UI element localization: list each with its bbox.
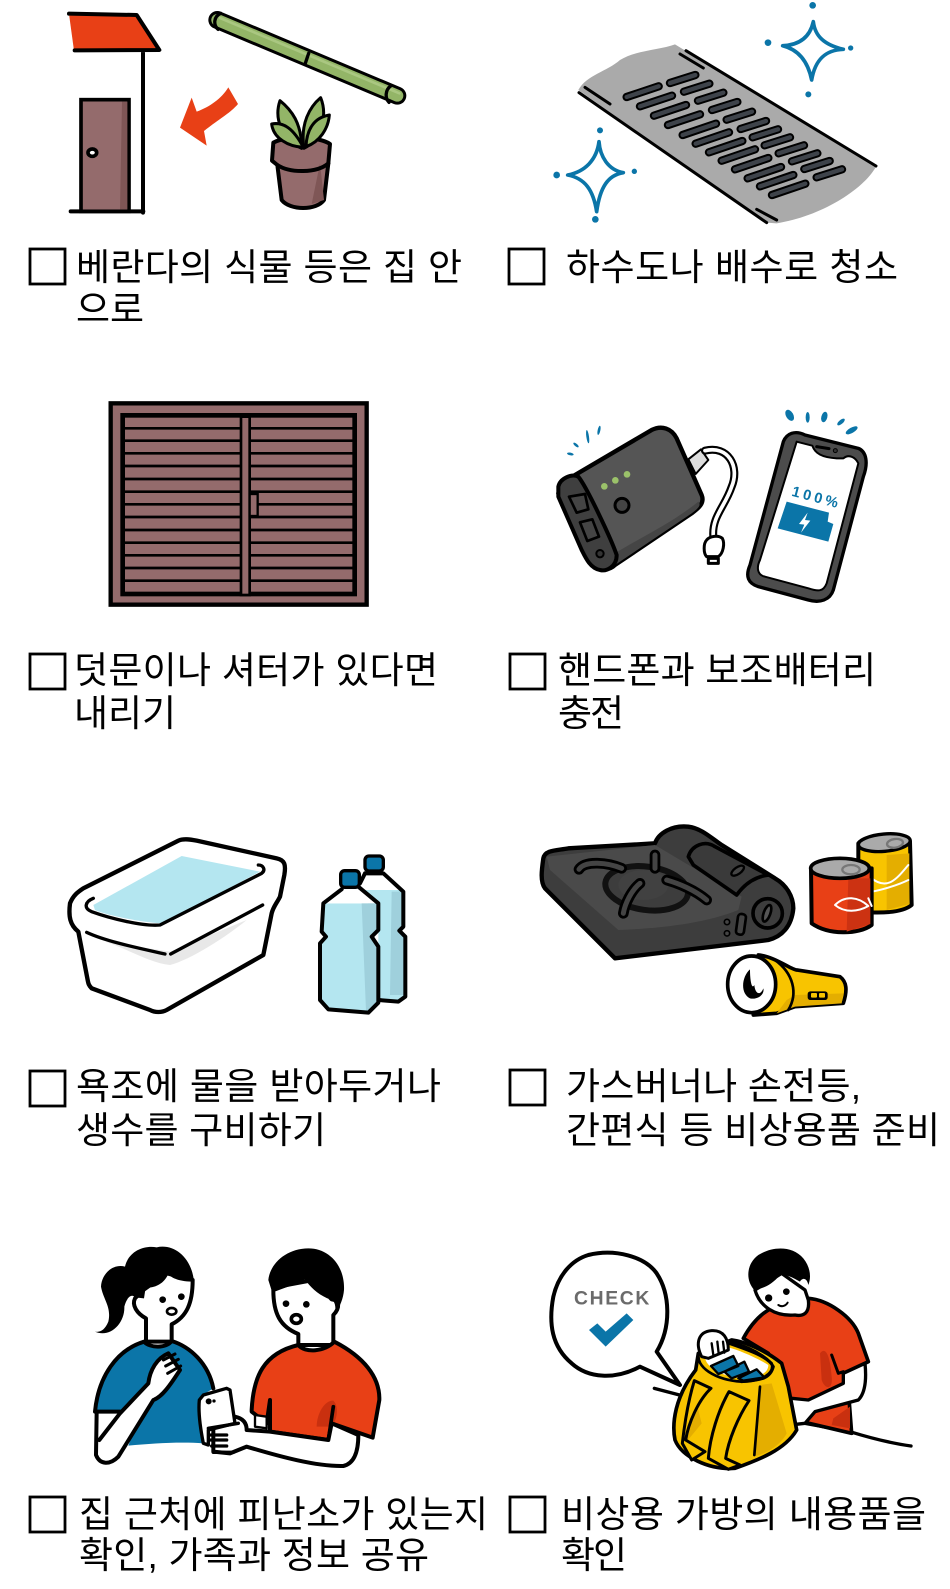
text block [79, 1494, 488, 1576]
checkbox [30, 1497, 65, 1532]
panel: check emergency bag [510, 1249, 926, 1576]
text block: 가스버너나 손전등, [566, 1066, 861, 1107]
icon: drain grate with sparkles [553, 2, 876, 223]
checkbox [510, 1497, 545, 1532]
icon: shutter [111, 403, 367, 605]
panel: store water [30, 839, 441, 1151]
speech bubble [551, 1253, 680, 1385]
text block: 욕조에 물을 받아두거나 [76, 1066, 441, 1107]
text block: 확인 [561, 1535, 627, 1576]
checkbox [30, 654, 65, 689]
icon: bathtub and water bottles [69, 839, 405, 1013]
panel: bring plants indoors [30, 13, 462, 330]
icon: power bank and smartphone [558, 408, 866, 601]
text block [76, 1066, 441, 1151]
checkbox [30, 249, 65, 284]
text block: 비상용 가방의 내용품을 [561, 1494, 926, 1535]
text block: 간편식 등 비상용품 준비 [566, 1110, 940, 1151]
text block: 집 근처에 피난소가 있는지 [79, 1494, 488, 1535]
text block [74, 650, 438, 734]
icon: stove, cans and flashlight [542, 826, 912, 1015]
checkbox [30, 1071, 65, 1106]
text block [558, 650, 876, 734]
text block: 확인, 가족과 정보 공유 [79, 1535, 429, 1576]
panel: clean drains [509, 2, 898, 288]
speech bubble: CHECK [574, 1289, 649, 1310]
panel: check shelter, share with family [30, 1247, 488, 1576]
icon: power bank and smartphone: 100% [790, 484, 840, 512]
icon: house, bamboo pole, plant and arrow [69, 13, 399, 213]
text block: 핸드폰과 보조배터리 [558, 650, 876, 691]
text block: 덧문이나 셔터가 있다면 [74, 650, 438, 691]
text block [566, 1066, 940, 1151]
checkbox [509, 249, 544, 284]
checkbox [510, 654, 545, 689]
text block: 하수도나 배수로 청소 [566, 247, 898, 288]
text block: 충전 [558, 693, 624, 734]
text block [561, 1494, 926, 1576]
text block: 베란다의 식물 등은 집 안 [76, 247, 462, 288]
text block [76, 247, 462, 330]
checkbox [510, 1070, 545, 1105]
illustration: man checking bag with speech bubble [551, 1249, 911, 1469]
panel: gas burner, flashlight, food [510, 826, 940, 1151]
panel: charge phone and battery [510, 408, 876, 734]
text block: 으로 [76, 289, 144, 330]
text block: 내리기 [74, 693, 176, 734]
text block: 생수를 구비하기 [76, 1110, 326, 1151]
icon: woman and man looking at a phone [95, 1247, 379, 1466]
panel: lower shutters [30, 403, 438, 734]
